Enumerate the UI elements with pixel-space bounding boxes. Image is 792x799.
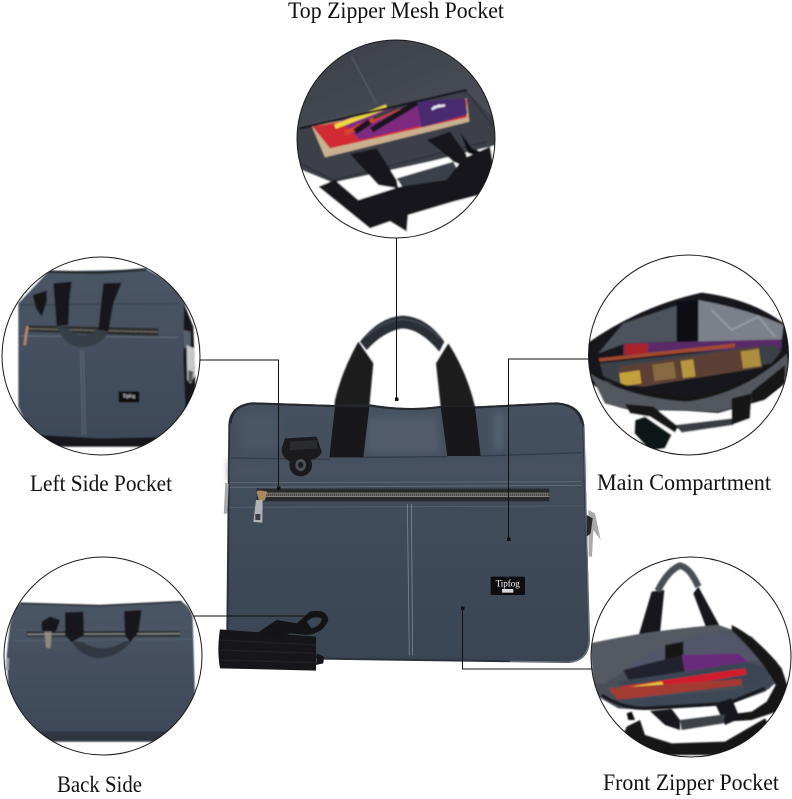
label: left side pocket: Left Side Pocket	[30, 471, 173, 496]
bag body	[590, 625, 782, 710]
shoulder strap	[725, 625, 788, 722]
handle and straps	[675, 418, 733, 433]
straps and handle below	[650, 709, 680, 730]
connector: back side	[193, 615, 315, 617]
panel: left side pocket	[2, 257, 200, 455]
bag body	[227, 403, 589, 662]
circle outline	[591, 557, 791, 757]
circle outline	[297, 40, 495, 238]
pocket lines	[230, 453, 583, 655]
connector: top zipper mesh pocket	[395, 238, 398, 401]
white area beneath bag	[621, 386, 783, 450]
panel: main compartment	[585, 255, 792, 463]
lower bag band	[590, 353, 789, 412]
panel: top zipper mesh pocket	[296, 40, 496, 238]
brand logo tag: Tipfog	[496, 579, 520, 589]
circle outline	[4, 557, 202, 755]
connector: left side pocket	[200, 360, 280, 490]
brand logo tag	[491, 577, 525, 595]
panel: front zipper pocket	[590, 557, 791, 757]
label: back side: Back Side	[57, 772, 142, 797]
straps	[350, 148, 398, 188]
white gaps beneath bag	[318, 144, 494, 232]
main bag photo	[218, 316, 601, 671]
handle grip	[397, 162, 462, 188]
top edge piping	[231, 403, 582, 423]
handle	[638, 590, 664, 637]
detachable shoulder strap	[218, 611, 328, 671]
connector: front zipper pocket	[461, 606, 593, 669]
front zipper	[253, 489, 549, 523]
label: front zipper pocket: Front Zipper Pocket	[603, 770, 780, 795]
handle straps front	[329, 407, 369, 457]
leather highlights	[230, 413, 582, 480]
label: main compartment: Main Compartment	[597, 470, 772, 495]
side zipper pulls	[224, 483, 601, 557]
panel: back side	[4, 557, 202, 755]
right edge piping	[510, 427, 589, 662]
circle outline	[588, 255, 788, 455]
circle outline	[2, 257, 200, 455]
bag handle	[329, 316, 481, 457]
connector: main compartment	[507, 359, 589, 541]
shoulder strap buckle at top pocket	[282, 437, 322, 476]
panel: left side pocket: Tipfog	[123, 394, 136, 399]
